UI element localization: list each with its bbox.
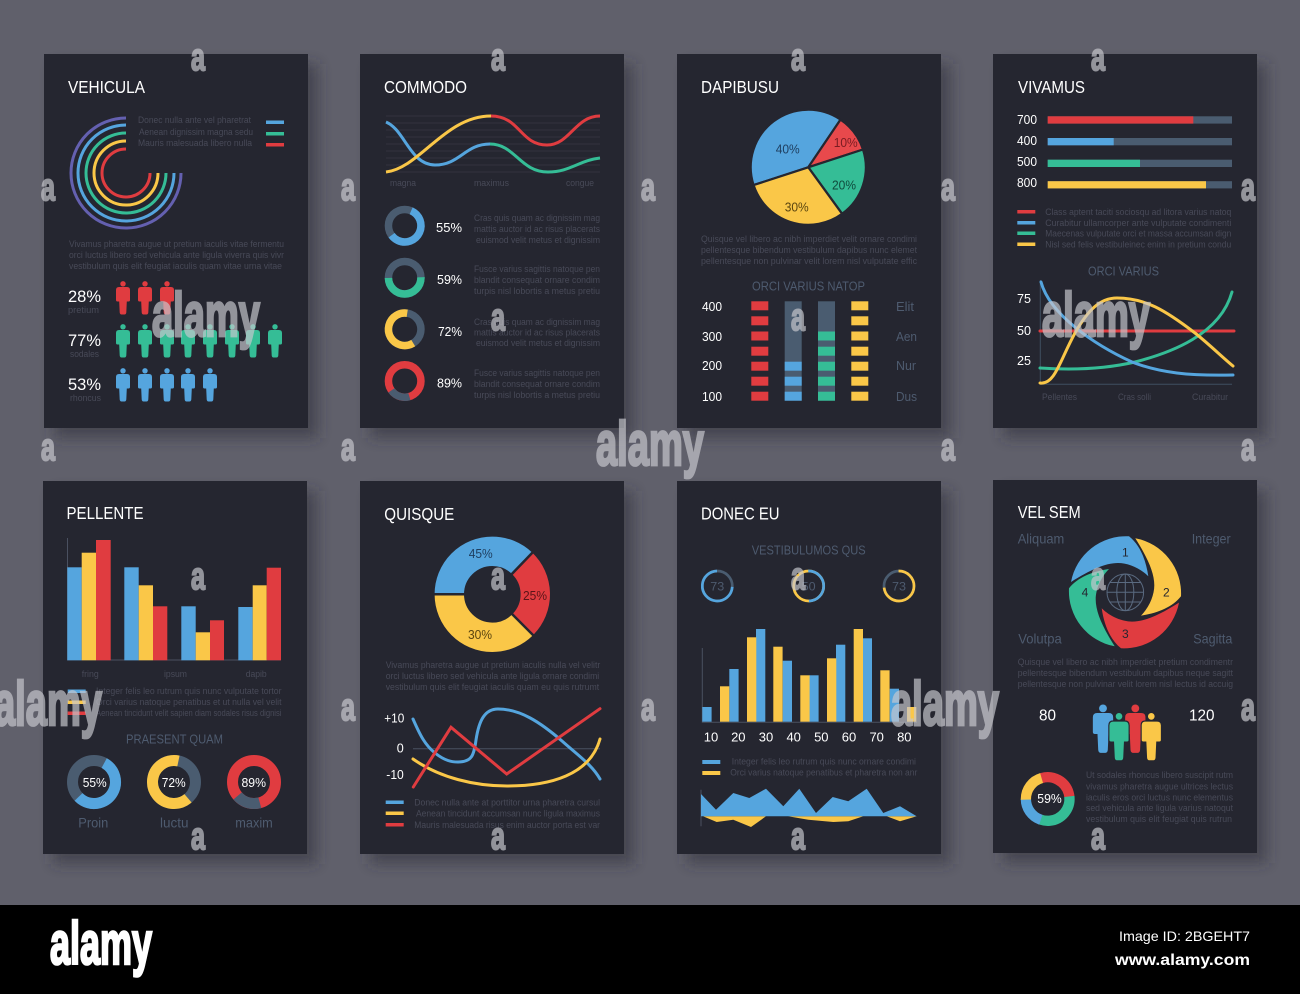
text block: quisque paragraph: orci luctus libero sed vehicula ante ligula ornare condimi [386,671,599,681]
text block: third description: euismod velit metus et dignissim [476,338,600,348]
stat: 80: 80 [1039,708,1056,724]
watermark overlay: a [491,297,506,339]
text block: first description: euismod velit metus et dignissim [476,235,600,245]
donut labels: 30% [468,627,492,642]
x axis labels [1042,392,1228,402]
watermark overlay: a [941,167,956,209]
donut: maxim: maxim [235,814,273,830]
panel: pellente [43,481,307,854]
text block: third description: Cras quis quam ac dignissim mag [474,317,600,327]
line chart y labels: +10 [384,710,404,726]
pie chart [751,110,866,225]
swirl diagram: 2 [1163,586,1170,600]
donut: proin: Proin [78,814,108,830]
segmented bar chart [751,301,868,401]
watermark overlay [0,37,1256,858]
horizontal progress bars: 500 [1017,154,1037,169]
panel: quisque [360,481,624,854]
legend: pellente [68,686,282,718]
corner labels [1018,530,1232,646]
watermark overlay: a [191,816,206,858]
donut: 59 percent: 59% [1037,791,1062,806]
watermark overlay: a [1241,167,1256,209]
x axis labels: Pellentes [1042,392,1077,402]
chart axis labels: magna [390,178,416,188]
bar chart labels [82,669,267,679]
stat: 77 percent sodales: 77% [68,331,101,350]
corner labels: Sagitta [1193,630,1232,646]
y axis labels [1017,291,1031,368]
watermark overlay: a [491,556,506,598]
heading: vestibulumos qus: VESTIBULUMOS QUS [752,542,866,558]
bar chart: right labels: Aen [896,329,917,344]
donut: 89 percent [385,361,425,401]
ring gauge: first 73: 73 [710,580,725,594]
horizontal progress bars: 400 [1017,133,1037,148]
text block: vehicula paragraph [69,239,284,271]
radial arc chart [71,118,181,228]
watermark overlay: a [1091,556,1106,598]
legend: pellente: Integer felis leo rutrum quis nunc vulputate tortor [96,686,282,696]
website: www.alamy.com [1114,952,1250,969]
text block: donut description [1086,770,1233,824]
donut labels: 45% [469,546,493,561]
text block: donut description: vivamus pharetra augue ultrices lectus [1086,782,1233,792]
panel shadows [53,64,1267,864]
horizontal progress bars: 700 [1017,112,1037,127]
watermark overlay: a [791,816,806,858]
donut chart [431,533,553,655]
legend: quisque: Donec nulla ante at porttitor urna pharetra cursul [414,798,600,808]
stat: 120: 120 [1189,708,1215,724]
text block: quisque paragraph: Vivamus pharetra augue ut pretium iaculis nulla vel velitr [386,660,600,670]
bar chart: y axis labels: 100 [702,389,722,404]
corner labels: Integer [1192,530,1231,546]
text block: vel sem paragraph: pellentesque non pulvinar velit lorem nisl lectus id accuig [1018,679,1233,689]
text block: second description: Fusce varius sagittis natoque pen [474,264,600,274]
image id: Image ID: 2BGEHT7 [1119,928,1250,944]
y axis labels: 75 [1017,291,1031,306]
text block: third description [474,317,600,348]
pie labels: 10% [834,135,858,150]
bar chart x labels [704,730,912,744]
watermark overlay: a [341,687,356,729]
bar chart x labels: 40 [786,730,801,744]
pie labels [776,135,858,214]
watermark overlay: alamy [596,410,704,479]
panel: donec eu [677,481,941,854]
bar chart x labels: 60 [842,730,856,744]
value: 59 percent: 59% [437,272,462,287]
watermark overlay: a [641,167,656,209]
text block: fourth description: Fusce varius sagittis natoque pen [474,368,600,378]
panel: vivamus [993,54,1257,428]
watermark overlay: a [791,556,806,598]
stat: 28 percent pretium [68,281,174,315]
icon: group of people [1093,704,1161,761]
bar chart x labels: 10 [704,730,718,744]
swirl diagram [1069,536,1181,648]
text block: second description: blandit consequat ornare condim [474,275,600,285]
bar chart labels: fring [82,669,99,679]
ring gauge: 50: 50 [802,580,816,594]
watermark overlay: a [791,297,806,339]
legend: quisque: Mauris malesuada risus enim auctor porta est var [414,820,600,830]
legend: donec eu [702,756,917,778]
bar chart x labels: 20 [731,730,746,744]
line chart [413,709,600,787]
donut: proin [65,753,123,830]
watermark overlay: a [191,37,206,79]
bar chart: right labels: Dus [896,389,917,404]
watermark overlay: a [491,816,506,858]
ring gauge: second 73 [884,571,914,601]
line chart y labels: -10 [386,767,404,782]
bar chart labels: ipsum [164,669,187,679]
heading: commodo: COMMODO [384,77,467,97]
legend: quisque: Aenean tincidunt accumsan nunc ligula maximus [416,808,600,818]
horizontal progress bars: 800 [1017,175,1037,190]
legend: vivamus: Curabitur ullamcorper ante vulputate condimenti [1045,218,1231,228]
bar chart: y axis labels: 300 [702,329,722,344]
bar chart: right labels: Elit [896,299,914,314]
x axis labels: Curabitur [1192,392,1228,402]
watermark overlay: alamy [1042,281,1150,350]
text block: fourth description [474,368,600,400]
donut: 55 percent [383,204,426,247]
panel: vehicula [44,54,308,428]
legend: arc chart [138,115,284,148]
watermark overlay: a [41,427,56,469]
donut: maxim: 89% [242,776,266,790]
multi-line curve chart [1040,280,1234,384]
donut: luctu: luctu [160,814,188,830]
watermark overlay: a [791,37,806,79]
heading: dapibusu: DAPIBUSU [701,77,779,97]
legend: pellente: Aenean tincidunt velit sapien diam sodales risus dignisi [96,708,282,718]
stat: 53 percent rhoncus: 53% [68,375,101,394]
watermark overlay: a [941,427,956,469]
swirl diagram: 4 [1082,586,1089,600]
legend: vivamus: Class aptent taciti sociosqu ad litora varius natoq [1045,207,1231,217]
footer logo: alamy [50,910,152,977]
bar chart: y axis labels: 200 [702,358,722,373]
chart axis labels [390,178,594,188]
stat: 53 percent rhoncus: rhoncus [70,393,101,403]
horizontal progress bars [1017,112,1232,190]
text block: dapibusu paragraph: Quisque vel libero ac nibh imperdiet velit ornare condimi [701,234,917,244]
heading: vivamus: VIVAMUS [1018,77,1085,97]
heading: orci varius: ORCI VARIUS [1088,264,1159,278]
paired bar chart [702,629,917,722]
corner labels: Volutpa [1018,630,1062,646]
text block: quisque paragraph [386,660,600,692]
bar chart: y axis labels [702,299,722,404]
bar chart labels: dapib [246,669,267,679]
legend: vivamus: Nisl sed felis vestibuleinec enim in pretium condu [1045,240,1231,250]
line chart [386,116,600,172]
bar chart: right labels [896,299,917,404]
pie labels: 40% [776,142,800,156]
bar chart: y axis labels: 400 [702,299,722,314]
icon: globe [1107,574,1144,611]
donut: luctu: 72% [162,776,186,790]
stat: 77 percent sodales [68,324,282,359]
y axis labels: 50 [1017,323,1031,338]
heading: pellente: PELLENTE [66,503,144,523]
text block: first description [474,213,600,245]
stat: 77 percent sodales: sodales [70,349,99,359]
text block: vel sem paragraph: Quisque vel libero ac nibh imperdiet pretium condimentr [1018,657,1233,667]
legend: pellente: Orci varius natoque penatibus et ut nulla vel velit [96,697,282,707]
text block: donut description: vestibulum quis elit feugiat quis rutrun [1086,814,1232,824]
value: 55 percent: 55% [436,220,462,235]
ring gauge: second 73: 73 [892,580,906,594]
panel: dapibusu [677,54,941,428]
heading: donec eu: DONEC EU [701,504,780,524]
donut labels [468,546,547,642]
watermark overlay: a [1091,37,1106,79]
swirl diagram: 3 [1122,627,1129,641]
swirl diagram: 1 [1122,546,1129,560]
text block: fourth description: turpis nisl lobortis a metus pretiu [474,390,600,400]
donut: maxim [228,756,280,830]
legend: vivamus [1017,207,1231,250]
text block: donut description: sed vehicula ante ligula varius natoqut [1086,803,1233,813]
text block: dapibusu paragraph [701,234,917,266]
donut: 59 percent [1020,771,1076,827]
watermark overlay: a [491,37,506,79]
watermark overlay: a [1241,687,1256,729]
value: 89 percent: 89% [437,376,462,390]
x axis labels: Cras solli [1118,392,1151,402]
text block: quisque paragraph: vestibulum quis elit feugiat iaculis quam eu quis rutrumt [386,682,600,692]
text block: donut description: iaculis eros orci luctus nunc elementus [1086,792,1233,802]
pie labels: 20% [832,178,856,192]
text block: vehicula paragraph: vestibulum quis elit feugiat iaculis quam vitae urna vitae [69,261,282,271]
legend: arc chart: Aenean dignissim magna sedu [139,127,253,137]
text block: second description [474,264,600,296]
watermark overlay: a [341,427,356,469]
corner labels: Aliquam [1018,530,1064,546]
text block: vehicula paragraph: orci luctus libero sed vehicula ante ligula viverra quis vivr [69,250,284,260]
footer bar [0,905,1300,994]
legend: arc chart: Donec nulla ante vel pharetrat [138,115,251,125]
text block: third description: mattis auctor id ac risus placerats [474,328,600,338]
area chart [701,789,917,827]
heading: vel sem: VEL SEM [1018,502,1081,522]
text block: dapibusu paragraph: pellentesque non pulvinar velit lorem nisl vulputate effic [701,256,917,266]
heading: orci varius natop: ORCI VARIUS NATOP [752,278,865,294]
text block: fourth description: blandit consequat ornare condim [474,379,600,389]
text block: dapibusu paragraph: pellentesque bibendum vestibulum dapibus nunc elemet [701,245,917,255]
panel: commodo [360,54,624,428]
watermark overlay: alamy [891,670,999,739]
watermark overlay: a [41,167,56,209]
text block: first description: Cras quis quam ac dignissim mag [474,213,600,223]
chart axis labels: congue [566,178,594,188]
bar chart x labels: 80 [897,730,912,744]
text block: second description: turpis nisl lobortis a metus pretiu [474,286,600,296]
chart axis labels: maximus [474,178,509,188]
text block: vel sem paragraph: pellentesque bibendum vestibulum dapibus neque sagitt [1018,668,1233,678]
legend: quisque [386,798,600,830]
heading: praesent quam: PRAESENT QUAM [126,732,223,746]
text block: vel sem paragraph [1018,657,1233,689]
text block: first description: mattis auctor id ac risus placerats [474,224,600,234]
bar chart x labels: 50 [814,730,829,744]
bar chart x labels: 30 [759,730,773,744]
heading: vehicula: VEHICULA [68,77,145,97]
stat: 53 percent rhoncus [68,368,217,403]
line chart y labels [384,710,404,782]
text block: donut description: Ut sodales rhoncus libero suscipit rutm [1086,770,1233,780]
grouped bar chart [67,538,281,660]
legend: arc chart: Mauris malesuada libero nulla [138,138,252,148]
donut: luctu [144,752,204,830]
watermark overlay: a [1091,816,1106,858]
donut: 72 percent [383,307,427,351]
text block: vehicula paragraph: Vivamus pharetra augue ut pretium iaculis vitae fermentu [69,239,284,249]
watermark overlay: a [341,167,356,209]
watermark overlay: a [191,556,206,598]
value: 72 percent: 72% [438,324,462,339]
heading: quisque: QUISQUE [384,504,454,524]
legend: donec eu: Integer felis leo rutrum quis nunc ornare condimi [732,756,916,766]
watermark overlay: alamy [152,281,260,350]
donut: proin: 55% [83,776,107,790]
legend: vivamus: Maecenas vulputate orci et massa accumsan dign [1045,228,1231,238]
watermark overlay: a [641,687,656,729]
line chart y labels: 0 [397,740,404,756]
stat: 28 percent pretium: pretium [68,305,99,315]
legend: donec eu: Orci varius natoque penatibus et pharetra non anr [730,768,917,778]
stat: 28 percent pretium: 28% [68,287,101,306]
pie labels: 30% [785,200,809,214]
watermark overlay: a [1241,427,1256,469]
donut: 59 percent [388,261,421,294]
ring gauge: first 73 [701,570,734,602]
panel: vel sem [993,480,1257,853]
bar chart: right labels: Nur [896,358,917,373]
bar chart x labels: 70 [869,730,884,744]
y axis labels: 25 [1017,353,1031,368]
donut labels: 25% [523,588,547,603]
ring gauge: 50 [794,571,824,601]
